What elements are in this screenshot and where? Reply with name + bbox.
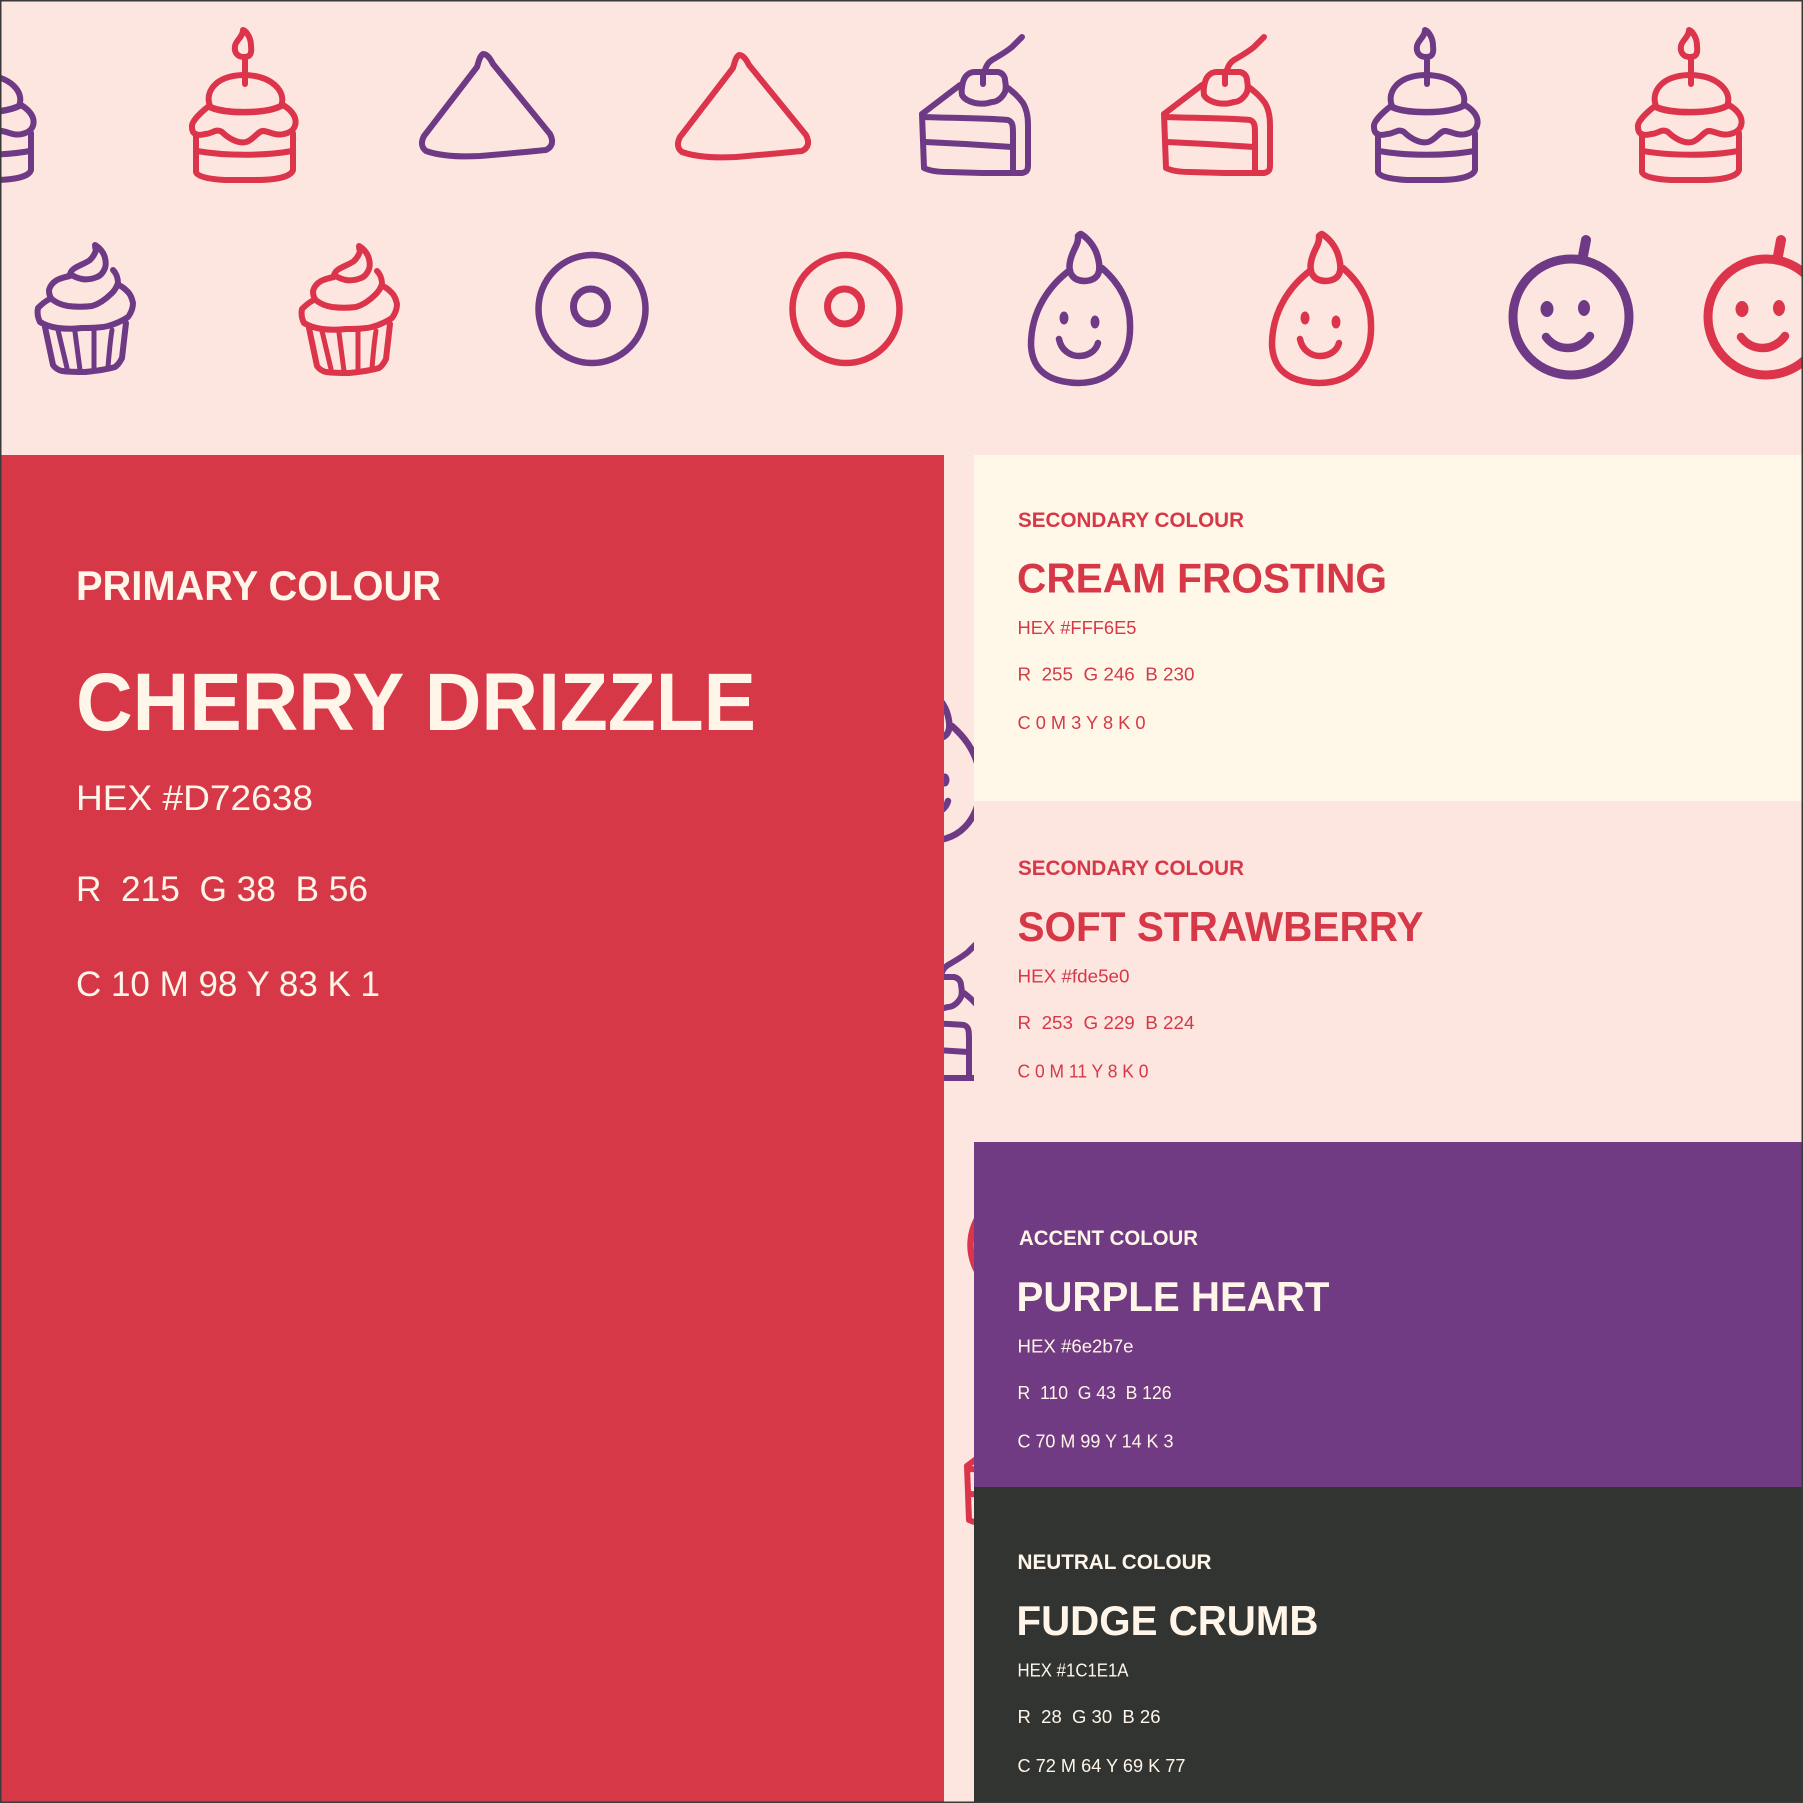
icon: birthday cake red right [1638,30,1742,180]
purple rgb: R 110 G 43 B 126 [1018,1383,1172,1403]
primary hex: HEX #D72638 [76,779,313,818]
icon: cake slice purple [922,37,1028,173]
fudge rgb: R 28 G 30 B 26 [1018,1707,1160,1727]
cream name: CREAM FROSTING [1017,554,1387,602]
icon: birthday cake purple [1374,30,1478,180]
fudge name: FUDGE CRUMB [1016,1597,1318,1644]
strawberry hex: HEX #fde5e0 [1018,967,1130,987]
fudge hex: HEX #1C1E1A [1018,1661,1128,1681]
cream label: SECONDARY COLOUR [1018,508,1244,532]
icon: birthday cake (partial left) [0,30,34,180]
panel: primary colour [0,455,944,1803]
strawberry label: SECONDARY COLOUR [1018,856,1244,880]
panel: purple heart [974,1142,1803,1487]
purple label: ACCENT COLOUR [1019,1226,1198,1250]
primary rgb: R 215 G 38 B 56 [76,870,368,909]
icon: party hat purple [422,54,552,156]
purple hex: HEX #6e2b7e [1018,1337,1134,1357]
icon: round face purple [1513,240,1629,375]
fudge cmyk: C 72 M 64 Y 69 K 77 [1018,1756,1186,1776]
cream hex: HEX #FFF6E5 [1018,618,1136,638]
strawberry cmyk: C 0 M 11 Y 8 K 0 [1018,1062,1148,1082]
icon: red slice behind panels [967,1389,1073,1525]
primary label: PRIMARY COLOUR [76,562,441,609]
icon: cupcake red [302,246,397,373]
icon: drop face behind panels [881,692,980,841]
fudge label: NEUTRAL COLOUR [1018,1550,1212,1574]
panel: soft strawberry [974,801,1803,1142]
icon: round face red [1708,240,1803,375]
primary colour name: CHERRY DRIZZLE [76,657,756,748]
panel: fudge crumb [974,1487,1803,1803]
icon: drop face purple [1031,234,1130,383]
strawberry name: SOFT STRAWBERRY [1018,903,1424,950]
primary cmyk: C 10 M 98 Y 83 K 1 [76,965,380,1004]
icon: donut red [792,255,900,363]
icon: cupcake purple [38,245,133,372]
icon: cake slice behind panels [878,942,984,1078]
icon: birthday cake red [192,30,296,180]
purple name: PURPLE HEART [1016,1273,1330,1320]
icon: donut behind panels [970,1191,1078,1299]
cream cmyk: C 0 M 3 Y 8 K 0 [1018,713,1146,733]
icon: cake slice red [1164,37,1270,173]
icon: drop face red [1272,234,1371,383]
strawberry rgb: R 253 G 229 B 224 [1018,1013,1194,1033]
cream rgb: R 255 G 246 B 230 [1018,664,1194,684]
purple cmyk: C 70 M 99 Y 14 K 3 [1018,1432,1174,1452]
icon: party hat red [678,55,808,157]
icon: donut purple [538,255,646,363]
panel: cream frosting [974,455,1803,801]
